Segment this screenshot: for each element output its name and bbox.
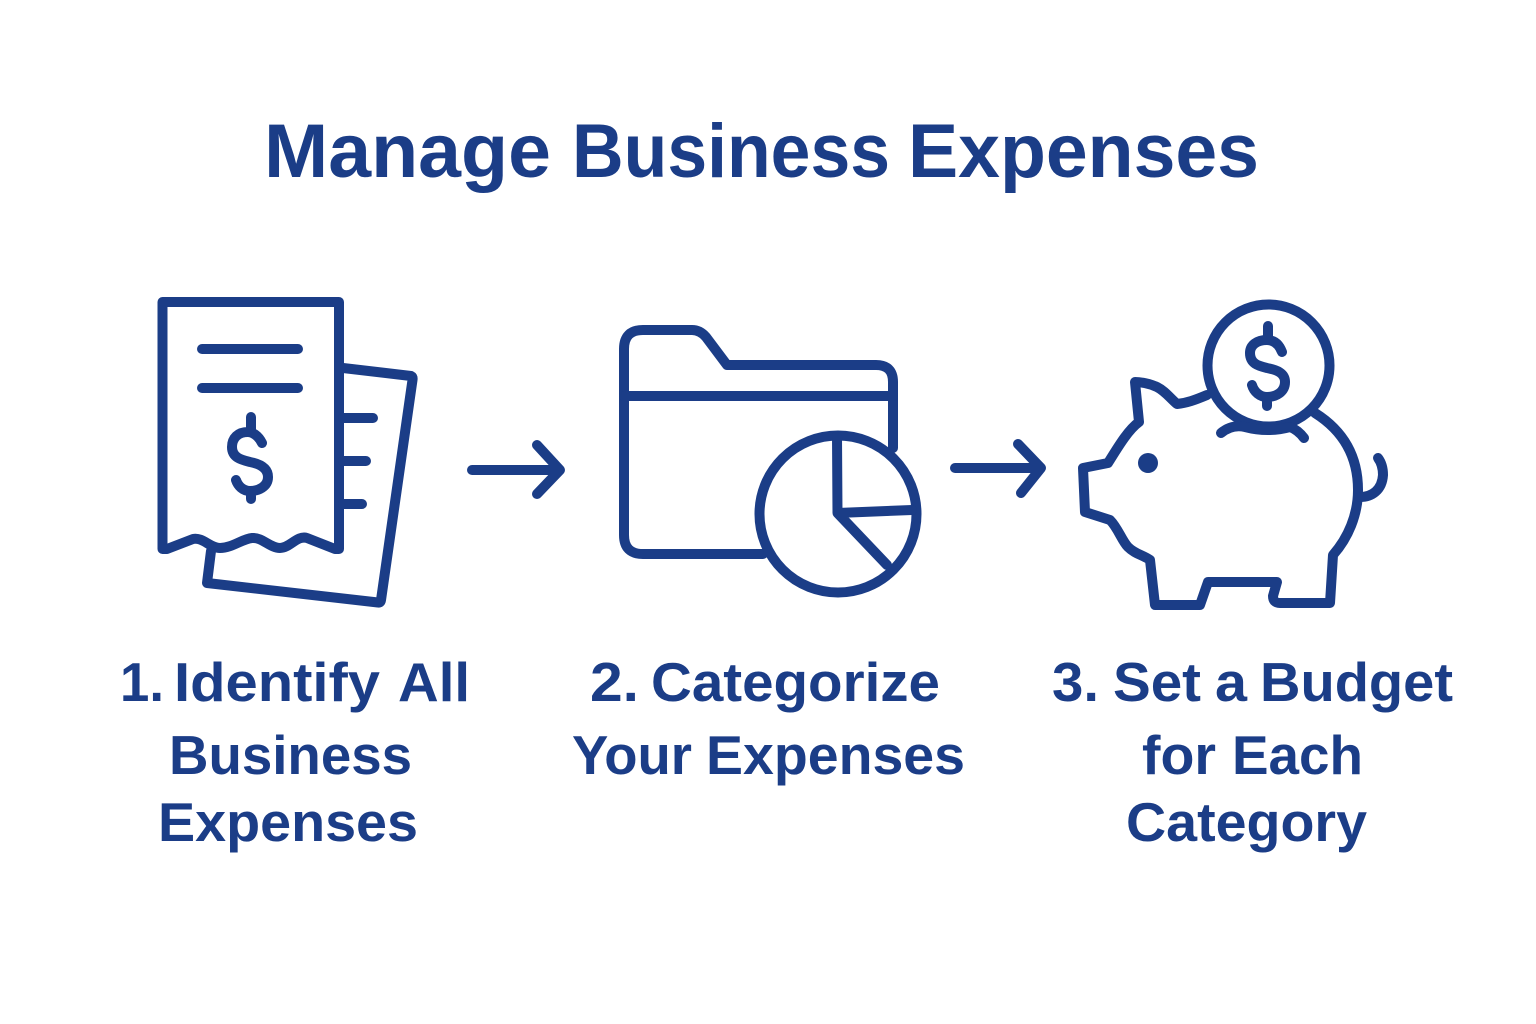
title: Manage <box>264 109 551 194</box>
title <box>264 109 1259 194</box>
pig eye <box>1138 453 1158 473</box>
step 1 label: All <box>398 651 470 713</box>
step 2 label <box>572 651 965 786</box>
step 2 label: 2. <box>590 651 639 713</box>
step 3 label: Set <box>1113 651 1201 713</box>
icon: folder with pie chart <box>624 330 916 592</box>
step 1 label: 1. <box>120 651 164 713</box>
step 3 label: Budget <box>1260 651 1453 713</box>
step 3 label: for <box>1142 724 1216 786</box>
title: Business <box>572 109 890 194</box>
step 2 label: Your <box>572 724 692 786</box>
arrow 1 <box>472 445 560 494</box>
icon: receipts with dollar sign <box>162 302 413 603</box>
pig tail <box>1360 458 1383 497</box>
step 3 label: Each <box>1232 724 1363 786</box>
step 2 label: Expenses <box>706 724 965 786</box>
step 3 label: a <box>1215 651 1247 713</box>
step 3 label <box>1052 651 1453 853</box>
step 3 label: Category <box>1126 791 1367 853</box>
arrow 2 <box>955 444 1041 493</box>
step 2 label: Categorize <box>651 651 940 713</box>
step 1 label: Identify <box>174 651 380 713</box>
step 1 label: Business <box>169 724 412 786</box>
title: Expenses <box>908 109 1259 194</box>
icon: piggy bank with coin <box>1083 304 1383 605</box>
step 1 label: Expenses <box>158 791 418 853</box>
step 3 label: 3. <box>1052 651 1099 713</box>
step 1 label <box>120 651 470 853</box>
